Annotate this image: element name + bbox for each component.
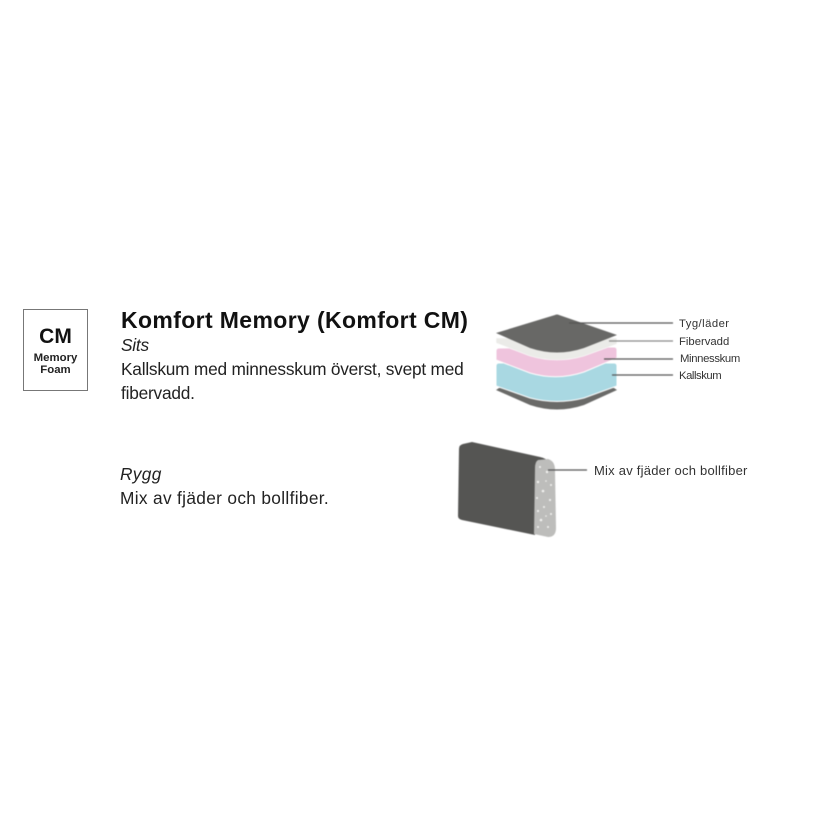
leader line: back [548, 469, 587, 471]
text block: seat [121, 335, 464, 403]
badge caption [34, 352, 78, 376]
text block: seat: Sits [121, 335, 149, 355]
leader lines: seat [569, 323, 673, 375]
label: fibre wadding: Fibervadd [679, 336, 729, 348]
memory foam layer [496, 347, 617, 377]
text block: seat: fibervadd. [121, 383, 195, 403]
text block: back: Rygg [120, 464, 162, 484]
filling speckles [536, 466, 552, 528]
label: cold foam: Kallskum [679, 370, 721, 382]
label: memory foam: Minnesskum [680, 353, 740, 365]
label: fabric: Tyg/läder [679, 318, 730, 330]
badge caption: Foam [40, 364, 71, 376]
badge: CM Memory Foam [23, 309, 88, 391]
text block: back [120, 464, 329, 508]
badge caption: Memory [34, 352, 77, 364]
text block: seat: Kallskum med minnesskum överst, svept med [121, 359, 464, 379]
text block: back: Mix av fjäder och bollfiber. [120, 488, 329, 508]
badge code: CM [39, 325, 72, 348]
fabric top layer [496, 314, 617, 352]
title: Komfort Memory (Komfort CM) [121, 307, 468, 333]
back cushion filling [534, 459, 556, 537]
cold foam layer [496, 363, 617, 402]
fibre wadding layer [496, 338, 617, 360]
bottom layer [496, 388, 617, 410]
label: back filling: Mix av fjäder och bollfiber [594, 463, 748, 478]
back cushion body [458, 442, 548, 535]
